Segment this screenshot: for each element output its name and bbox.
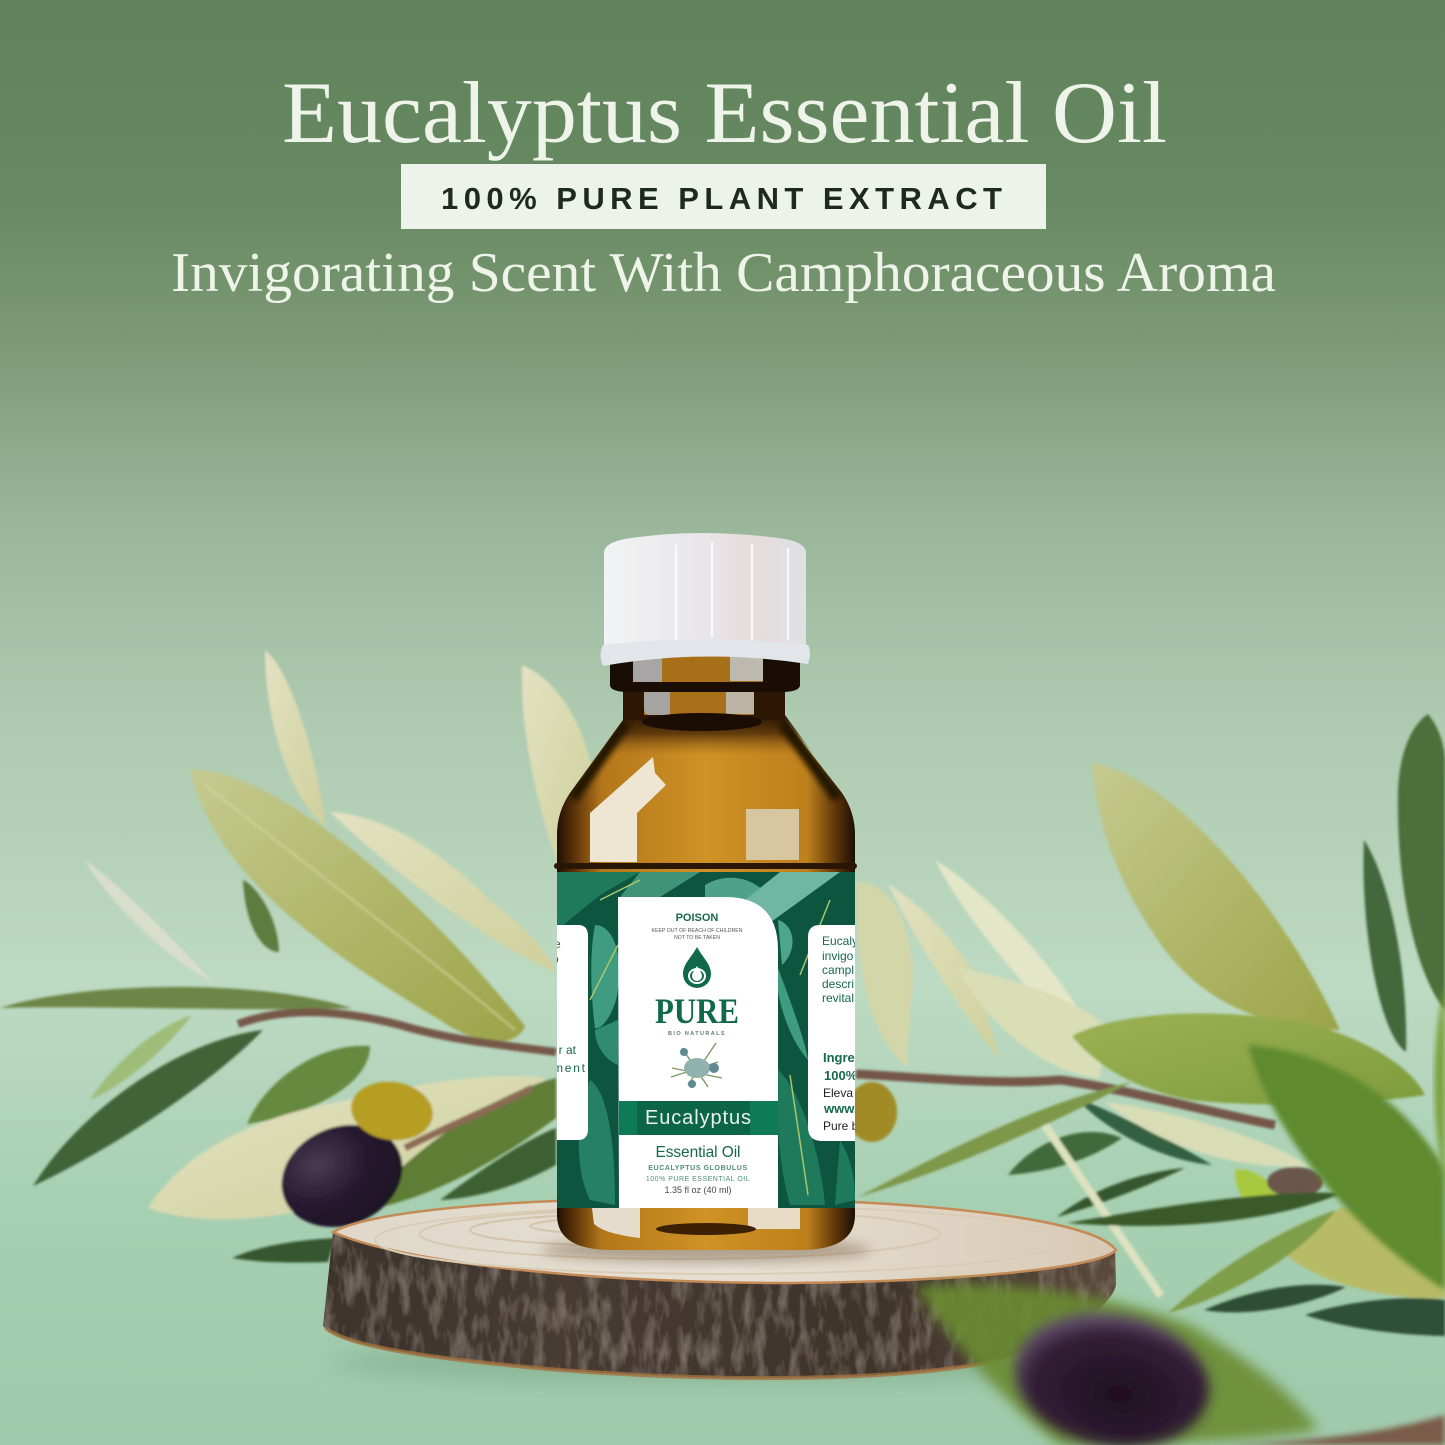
- leaf: blurred top right: [1248, 1045, 1445, 1290]
- label: product details: 1.35 fl oz (40 ml): [664, 1185, 732, 1195]
- label: left side panel: o: [552, 952, 559, 966]
- leaf: tall dark far right: [1398, 714, 1445, 1010]
- olive: yellow left: [347, 1077, 437, 1145]
- label: product details: EUCALYPTUS GLOBULUS: [648, 1165, 748, 1172]
- branch: left stem: [238, 1012, 556, 1052]
- label: left side panel: ment: [553, 1061, 586, 1075]
- icon: oil drop logo: [683, 947, 711, 988]
- label: left side panel: [557, 925, 588, 1140]
- label: right side panel: www.: [823, 1101, 857, 1116]
- label: front white panel: [618, 897, 778, 1208]
- banner: 100% pure plant extract: [401, 164, 1046, 229]
- label: right side panel: campl: [822, 963, 854, 977]
- label: poison warning: [652, 914, 742, 939]
- banner: 100% pure plant extract: 100% PURE PLANT EXTRACT: [441, 181, 1002, 216]
- leaf: pale upper: [265, 650, 326, 826]
- stand: bark side: [323, 1232, 1116, 1378]
- label: right side panel: invigo: [822, 949, 854, 963]
- bottle: ring: [554, 863, 857, 869]
- label: right side panel: 100%: [824, 1068, 858, 1083]
- label: product details: 100% PURE ESSENTIAL OIL: [646, 1176, 750, 1183]
- label: poison warning: POISON: [676, 912, 718, 924]
- bottle: amber body: [557, 690, 855, 1250]
- bottle: collar: [610, 655, 800, 692]
- bottle: base highlights: [592, 1208, 800, 1238]
- stand: top surface: [333, 1198, 1116, 1283]
- label: right side panel: Pure b: [823, 1119, 859, 1133]
- label: product name band: Eucalyptus: [645, 1107, 751, 1129]
- stand: bark base edge: [326, 1328, 1000, 1378]
- label: right side panel: [808, 925, 855, 1141]
- label: right side panel: descri: [822, 977, 854, 991]
- label: poison warning: NOT TO BE TAKEN: [674, 935, 720, 941]
- icon: eucalyptus sprig: [671, 1043, 722, 1088]
- stand: cast shadow: [330, 1342, 1110, 1382]
- bottle: neck: [623, 686, 785, 731]
- product label: [552, 872, 863, 1208]
- foliage: left olive branch: [0, 650, 592, 1263]
- stem: blurred bottom right: [1215, 1415, 1445, 1445]
- bottle: [552, 533, 863, 1250]
- logo: PURE wordmark: PURE: [655, 991, 739, 1031]
- leaf: broad green right: [1072, 1013, 1425, 1105]
- label: right side panel: Eleva: [823, 1086, 853, 1100]
- yellow-green leaf fragment: [1235, 1169, 1284, 1202]
- leaf: large olive right: [1092, 763, 1340, 1030]
- label: right side panel: Ingred: [823, 1050, 863, 1065]
- label: product details: [646, 1144, 750, 1195]
- label: poison warning: KEEP OUT OF REACH OF CHILDREN: [652, 928, 743, 934]
- branch: right stem: [856, 1074, 1275, 1125]
- olive: blurred dark foreground: [1004, 1298, 1220, 1445]
- bottle: glass highlight right: [746, 809, 799, 860]
- label: product details: Essential Oil: [656, 1144, 740, 1161]
- label: right side panel: Eucaly: [822, 934, 858, 948]
- label: leaf background: [557, 872, 855, 1208]
- label: product name band: [619, 1101, 778, 1135]
- leaf: large olive: [190, 770, 525, 1041]
- olive: dark left: [266, 1107, 418, 1245]
- bottle: shoulder shading: [557, 715, 855, 870]
- leaf: blurred bottom: [916, 1284, 1318, 1445]
- bottle: shoulder edge shadow: [572, 722, 838, 798]
- label: left side panel: e: [554, 937, 561, 951]
- label: left side panel: r at: [559, 1043, 577, 1057]
- wood slice stand: [323, 1198, 1116, 1382]
- olive: yellow behind bottle: [847, 1082, 897, 1142]
- olive: dark behind foliage right: [1267, 1167, 1323, 1197]
- label: right side panel: revital: [822, 991, 854, 1005]
- foliage: right olive branch: [847, 714, 1445, 1336]
- foreground blurred leaves and olive: [916, 985, 1445, 1445]
- logo: bio naturals: BIO NATURALS: [668, 1031, 726, 1037]
- bottle: white cap: [600, 533, 810, 666]
- subtitle: invigorating scent: Invigorating Scent With Camphoraceous Aroma: [171, 242, 1276, 304]
- bottle: glass highlight left: [590, 757, 666, 862]
- title: Eucalyptus Essential Oil: Eucalyptus Essential Oil: [282, 65, 1167, 162]
